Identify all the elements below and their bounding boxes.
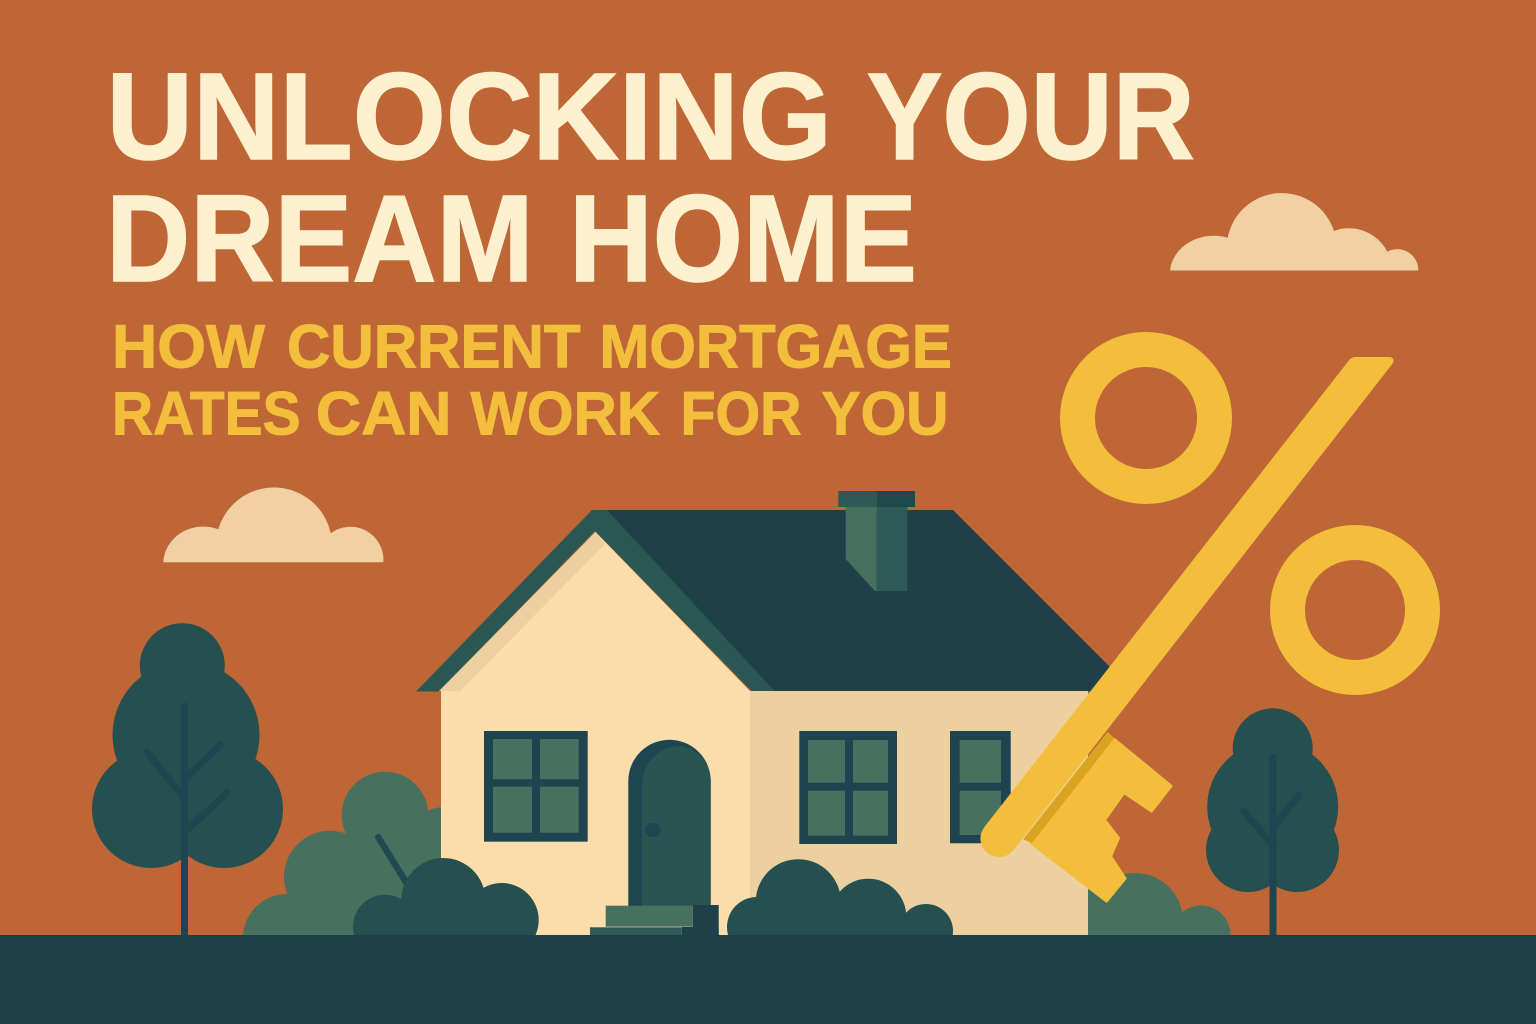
title: Unlocking Your Dream Home: UNLOCKING [106, 49, 832, 186]
subtitle: how current mortgage rates can work for you: WORK [470, 380, 660, 448]
title: Unlocking Your Dream Home [106, 49, 1195, 308]
cloud: left [163, 487, 383, 562]
percent sign circles [1078, 350, 1422, 678]
subtitle: how current mortgage rates can work for you [112, 312, 952, 448]
subtitle: how current mortgage rates can work for you: FOR [680, 380, 802, 448]
subtitle: how current mortgage rates can work for you: YOU [822, 380, 948, 448]
key forming the percent slash [980, 357, 1394, 901]
window: middle [799, 731, 897, 844]
cloud: upper right [1170, 193, 1418, 270]
front steps [590, 905, 719, 936]
chimney [838, 491, 915, 591]
bush: front left, dark green [353, 858, 539, 959]
key bit [1032, 740, 1171, 901]
window: right [950, 731, 1011, 843]
bush: front right, dark green [727, 859, 953, 958]
tree: left [92, 623, 283, 936]
bush: back right, light green [1085, 873, 1230, 969]
house walls [439, 532, 1088, 936]
key shaft [980, 357, 1394, 857]
title: Unlocking Your Dream Home: YOUR [867, 49, 1195, 186]
bush: back left, light green [243, 772, 488, 982]
subtitle: how current mortgage rates can work for you: CURRENT [287, 312, 581, 380]
front door [628, 740, 711, 906]
key shadow stripe [1023, 732, 1114, 843]
house roof [416, 510, 1115, 692]
subtitle: how current mortgage rates can work for you: HOW [112, 312, 265, 380]
ground [0, 935, 1536, 1024]
tree: right [1206, 708, 1339, 936]
subtitle: how current mortgage rates can work for you: MORTGAGE [600, 312, 952, 380]
title: Unlocking Your Dream Home: DREAM [106, 171, 534, 308]
subtitle: how current mortgage rates can work for you: CAN [316, 380, 452, 448]
title: Unlocking Your Dream Home: HOME [569, 171, 917, 308]
subtitle: how current mortgage rates can work for you: RATES [112, 380, 300, 448]
window: left [484, 731, 588, 842]
